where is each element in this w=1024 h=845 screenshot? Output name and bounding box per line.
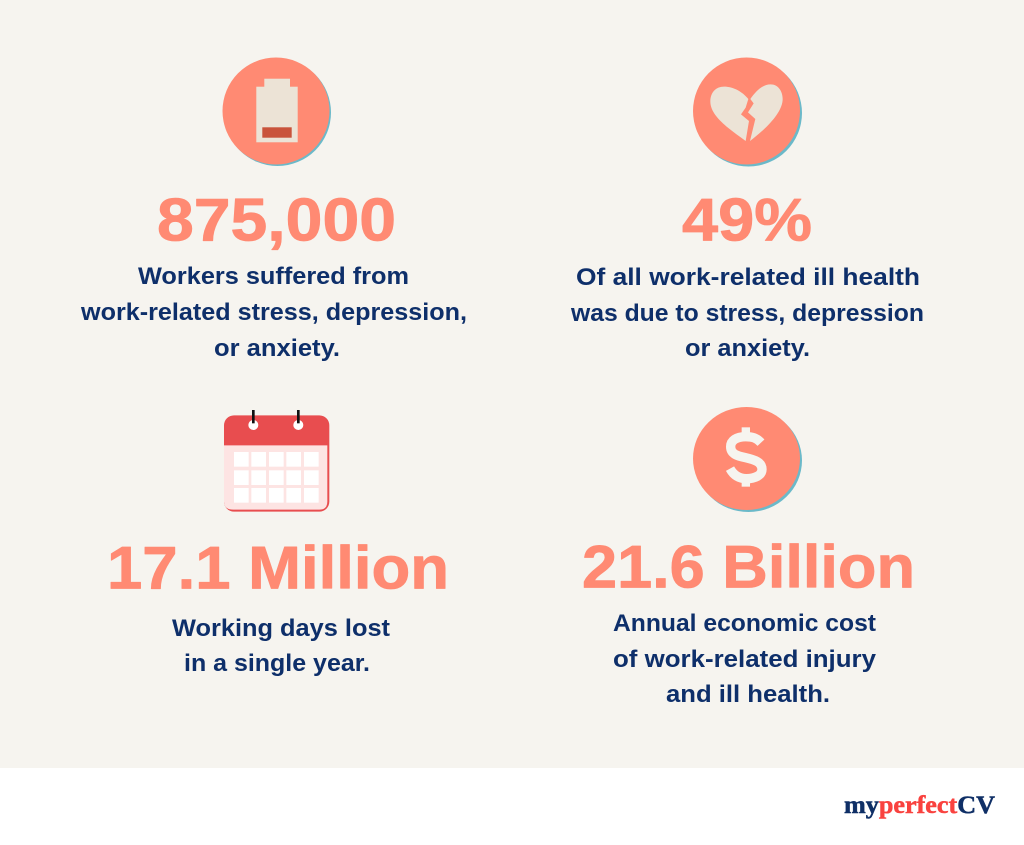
logo: myperfectCV: myperfectCV [844, 792, 995, 819]
stat: 21.6 Billion: 21.6 Billion [582, 534, 915, 600]
text: economic cost description: of work-related injury [613, 646, 876, 673]
text: workers description: Workers suffered from [138, 263, 409, 290]
stat: 49%: 49% [682, 186, 812, 254]
text: economic cost description: and ill health. [666, 681, 830, 708]
text: workers description: work-related stress, depression, [80, 299, 467, 326]
text: economic cost description: Annual economic cost [613, 610, 876, 637]
icon: broken heart [693, 58, 802, 166]
text: ill health description: or anxiety. [685, 335, 810, 362]
text: ill health description [570, 264, 924, 362]
stat: 875,000: 875,000 [157, 186, 396, 254]
text: working days description [172, 615, 390, 677]
panel: working days stat [107, 410, 449, 677]
icon: dollar coin [693, 407, 802, 512]
text: workers description [80, 263, 467, 362]
icon: calendar [224, 410, 329, 512]
text: working days description: in a single year. [184, 650, 370, 677]
panel: ill health stat [570, 58, 924, 362]
text: economic cost description [613, 610, 876, 708]
stat: 17.1 Million: 17.1 Million [107, 534, 449, 602]
panel: workers stat [80, 58, 467, 362]
panel: economic cost stat [582, 407, 915, 708]
text: ill health description: Of all work-related ill health [576, 264, 920, 291]
text: ill health description: was due to stress, depression [570, 300, 924, 327]
text: workers description: or anxiety. [214, 335, 340, 362]
text: working days description: Working days lost [172, 615, 390, 642]
icon: low battery [222, 58, 331, 166]
